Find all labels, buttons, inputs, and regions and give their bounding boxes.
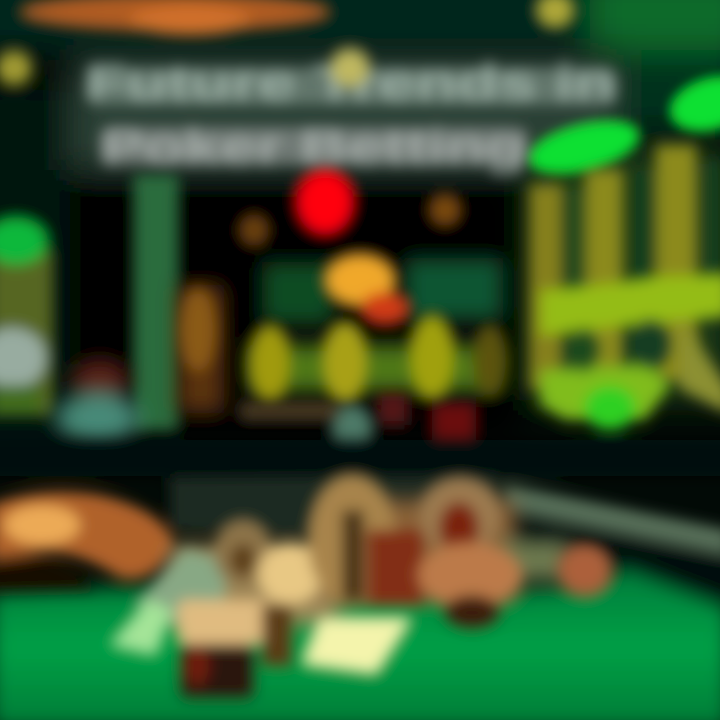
small amber lights xyxy=(239,194,461,246)
white card on felt xyxy=(302,618,412,674)
poker chips pile xyxy=(170,500,570,625)
title: Future Trends in Poker Betting: Poker Betting xyxy=(100,121,526,174)
yellow spot above title xyxy=(331,49,369,87)
title: Future Trends in Poker Betting xyxy=(85,57,616,174)
left slot machine xyxy=(0,217,52,415)
right slot machines xyxy=(530,145,720,390)
table rail xyxy=(0,440,720,610)
green machine lights xyxy=(524,68,720,182)
centre machines xyxy=(178,258,503,413)
green felt table xyxy=(0,565,720,720)
green pillar xyxy=(134,175,178,430)
background: upper wall xyxy=(0,0,720,440)
people at the table xyxy=(240,393,476,465)
red light xyxy=(296,169,354,235)
ceiling lamp glow xyxy=(0,0,573,85)
seated figure xyxy=(56,360,140,442)
title: Future Trends in Poker Betting: Future Trends in xyxy=(85,57,615,110)
hand reaching in xyxy=(0,492,175,592)
